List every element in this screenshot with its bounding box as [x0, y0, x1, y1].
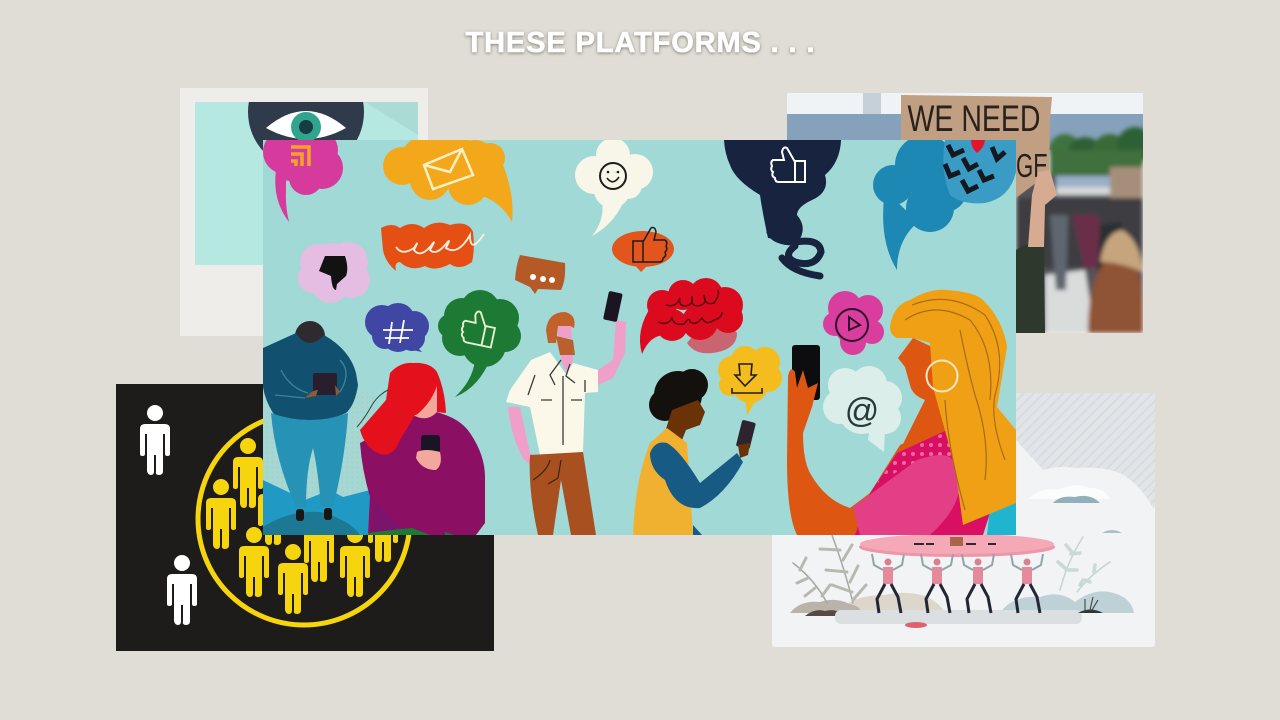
person: curly hair yellow vest: [633, 369, 756, 535]
bubble: dark thumbs up swirl: [724, 130, 841, 276]
bubble: green thumbs up: [438, 290, 521, 397]
panel: main illustration of phone users: [263, 130, 1016, 535]
sign text continued: GE: [1016, 147, 1048, 184]
bubble: smiley white: [575, 138, 653, 236]
bubble: blue hearts: [873, 135, 1016, 270]
person: red hair purple sweater: [357, 363, 485, 535]
panel: people lifting platform: [772, 393, 1155, 647]
person: blue standing: [263, 321, 385, 535]
raised platform: [859, 534, 1055, 557]
bubble: envelope orange: [383, 134, 513, 222]
bubble: at sign: @: [845, 392, 879, 430]
raised arm: [1028, 170, 1057, 247]
bubble: pink rss: [263, 140, 343, 222]
bubble: pink thumbs down: [298, 242, 370, 303]
bubble: pink play: [823, 291, 884, 355]
title: THESE PLATFORMS . . .: [466, 27, 814, 59]
bubble: hashtag: [365, 303, 429, 352]
icon: yellow ring with people: [198, 413, 410, 625]
panel: polaroid eye image: [180, 88, 428, 336]
bubble: red scribble: [381, 223, 484, 271]
bubble: brown dots: [515, 255, 565, 294]
sign text: WE NEED: [908, 98, 1040, 139]
icon: white person: [140, 405, 170, 475]
bubble: at sign: [823, 366, 902, 452]
plants: [793, 535, 1110, 603]
panel: crowd in circle: [116, 384, 494, 651]
panel: protest photo: [787, 93, 1153, 333]
person: man with beard taking selfie: [506, 291, 626, 535]
bubble: orange thumbs up: [612, 228, 674, 272]
person: blonde woman with phone: [787, 290, 1016, 535]
bubble: red scribble large: [640, 278, 743, 354]
figures lifting: [872, 554, 1043, 613]
icon: white person: [167, 555, 197, 625]
bubble: yellow download: [718, 346, 782, 415]
